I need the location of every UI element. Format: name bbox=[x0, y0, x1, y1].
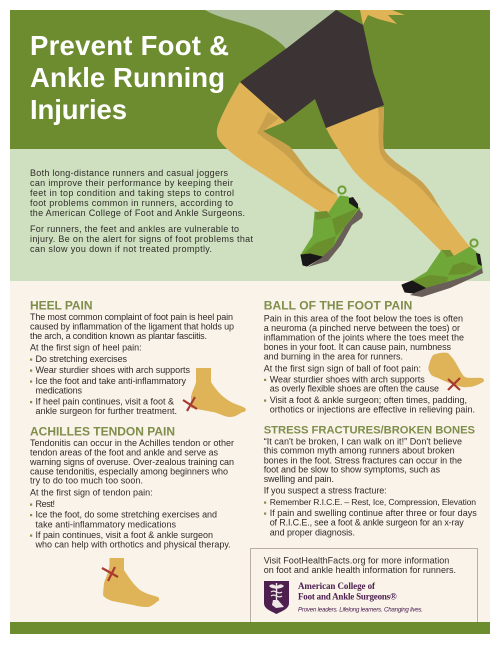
title: Ankle Running bbox=[30, 62, 225, 93]
list: ball of foot tips bbox=[264, 374, 475, 414]
text: ball of foot body: inflammation of the joints where the toes meet the bbox=[264, 332, 464, 342]
text: ball of foot body: a neuroma (a pinched nerve between the toes) or bbox=[264, 323, 460, 333]
panel: green header bbox=[10, 10, 490, 149]
text: ball of foot body: bones in your foot. It can cause pain, numbness bbox=[264, 342, 452, 352]
list: achilles tips: Ice the foot, do some stretching exercises and bbox=[36, 510, 217, 520]
text: visit site: Visit FootHealthFacts.org for more information bbox=[264, 555, 449, 565]
text: ball of foot body: At the first sign sign of ball of foot pain: bbox=[264, 363, 421, 373]
callout: visit box bbox=[250, 548, 478, 622]
list: heel pain tips: ankle surgeon for further treatment. bbox=[36, 406, 177, 416]
list: ball of foot tips: Visit a foot & ankle surgeon; often times, padding, bbox=[270, 395, 467, 405]
text: stress fractures body: this common myth among runners about broken bbox=[264, 446, 455, 456]
front leg shade bbox=[378, 107, 442, 211]
list: ball of foot tips: as overly flexible shoes are often the cause bbox=[270, 384, 439, 394]
back leg bbox=[217, 82, 345, 216]
shoe: back foot bbox=[301, 186, 363, 267]
heading: stress fractures: STRESS FRACTURES/BROKEN BONES bbox=[264, 424, 476, 436]
list: ball of foot tips: Wear sturdier shoes with arch supports bbox=[270, 374, 425, 384]
text: stress fractures body bbox=[264, 436, 462, 496]
intro text bbox=[30, 168, 253, 254]
text: achilles body: try to do too much too soon. bbox=[30, 476, 143, 486]
heading: achilles: ACHILLES TENDON PAIN bbox=[30, 424, 175, 438]
front leg bbox=[326, 107, 474, 262]
list: heel pain tips: If heel pain continues, visit a foot & bbox=[36, 396, 174, 406]
list: achilles tips: take anti-inflammatory medications bbox=[36, 519, 176, 529]
section: achilles tendon pain bbox=[29, 424, 234, 550]
intro text: injury. Be on the alert for signs of foot problems that bbox=[30, 234, 253, 244]
title: Prevent Foot & bbox=[30, 30, 229, 61]
list: heel pain tips: Wear sturdier shoes with arch supports bbox=[36, 365, 190, 375]
list: heel pain tips bbox=[30, 354, 190, 416]
text: heel pain body: The most common complaint of foot pain is heel pain bbox=[30, 312, 233, 322]
text: achilles body: tendon areas of the foot and ankle and serve as bbox=[30, 448, 218, 458]
intro text: can slow you down if not treated promptly. bbox=[30, 244, 212, 254]
text: ball of foot body: Pain in this area of the foot below the toes is often bbox=[264, 313, 463, 323]
list: achilles tips: who can help with orthotics and physical therapy. bbox=[34, 540, 231, 550]
list: ball of foot tips: orthotics or injections are effective in relieving pain. bbox=[270, 404, 475, 414]
text: visit site: on foot and ankle health information for runners. bbox=[264, 565, 456, 575]
text: achilles body: cause tendonitis, especially among beginners who bbox=[30, 466, 228, 476]
panel: content background bbox=[10, 281, 490, 622]
text: ball of foot body: and burning in the area for runners. bbox=[264, 351, 403, 361]
intro text: the American College of Foot and Ankle Surgeons. bbox=[30, 208, 245, 218]
text: stress fractures body: swelling and pain. bbox=[264, 474, 334, 484]
heading: ball of foot: BALL OF THE FOOT PAIN bbox=[264, 298, 412, 312]
list: heel pain tips: medications bbox=[36, 386, 82, 396]
shirt bbox=[205, 10, 336, 50]
back leg shade bbox=[257, 112, 337, 195]
list: heel pain tips: Ice the foot and take anti-inflammatory bbox=[36, 376, 186, 386]
shorts bbox=[240, 10, 384, 128]
text: stress fractures body: foot and be slow to show symptoms, such as bbox=[264, 465, 440, 475]
shoe: front foot bbox=[412, 239, 482, 288]
logo: wordmark: Proven leaders. Lifelong learners. Changing lives. bbox=[298, 607, 423, 614]
intro text: foot problems common in runners, according to bbox=[30, 198, 233, 208]
text: visit site bbox=[264, 555, 456, 575]
text: stress fractures body: “It can't be broken, I can walk on it!” Don't believe bbox=[264, 436, 462, 446]
logo: shield bbox=[264, 581, 289, 614]
logo: wordmark: American College of bbox=[298, 581, 376, 591]
text: heel pain body bbox=[30, 312, 234, 352]
text: achilles body: At the first sign of tendon pain: bbox=[30, 488, 153, 498]
icon: achilles foot bbox=[102, 558, 159, 607]
intro text: For runners, the feet and ankles are vulnerable to bbox=[30, 224, 239, 234]
section: ball of the foot pain bbox=[264, 298, 475, 414]
logo: wordmark bbox=[298, 581, 423, 614]
intro text: Both long-distance runners and casual joggers bbox=[30, 168, 228, 178]
text: heel pain body: At the first sign of heel pain: bbox=[30, 342, 142, 352]
panel: intro background bbox=[10, 149, 490, 281]
intro text: can improve their performance by keeping their bbox=[30, 178, 233, 188]
footer bar bbox=[10, 622, 490, 634]
title: Injuries bbox=[30, 94, 127, 125]
list: achilles tips: If pain continues, visit a foot & ankle surgeon bbox=[36, 530, 213, 540]
text: heel pain body: caused by inflammation of the ligament that holds up bbox=[30, 322, 234, 332]
list: heel pain tips: Do stretching exercises bbox=[36, 354, 128, 364]
list: stress fracture tips: If pain and swelling continue after three or four days bbox=[270, 508, 477, 518]
hand bbox=[360, 10, 405, 25]
illustration: runner legs bbox=[205, 10, 482, 288]
list: achilles tips bbox=[30, 499, 231, 550]
list: achilles tips: Rest! bbox=[36, 499, 55, 509]
list: stress fracture tips: of R.I.C.E., see a foot & ankle surgeon for an x-ray bbox=[270, 518, 464, 528]
intro text: feet in top condition and taking steps to control bbox=[30, 188, 234, 198]
text: stress fractures body: bones in the foot. Stress fractures can occur in the bbox=[264, 455, 462, 465]
icon: heel foot bbox=[183, 368, 246, 417]
icon: ball of foot bbox=[428, 353, 484, 390]
list: stress fracture tips bbox=[264, 497, 477, 537]
text: achilles body: Tendonitis can occur in the Achilles tendon or other bbox=[30, 438, 234, 448]
front shoe overhang onto cream panel bbox=[402, 268, 483, 297]
text: achilles body bbox=[29, 438, 234, 498]
list: stress fracture tips: Remember R.I.C.E. – Rest, Ice, Compression, Elevation bbox=[270, 497, 476, 507]
section: heel pain bbox=[30, 298, 234, 416]
logo: wordmark: Foot and Ankle Surgeons® bbox=[298, 591, 397, 601]
text: heel pain body: the arch, a condition known as plantar fasciitis. bbox=[30, 331, 207, 341]
list: stress fracture tips: and proper diagnosis. bbox=[270, 527, 355, 537]
section: stress fractures bbox=[264, 424, 477, 537]
text: ball of foot body bbox=[264, 313, 464, 373]
title bbox=[30, 30, 229, 125]
heading: heel pain: HEEL PAIN bbox=[30, 298, 92, 312]
text: achilles body: warning signs of overuse. Over-zealous training can bbox=[29, 457, 234, 467]
text: stress fractures body: If you suspect a stress fracture: bbox=[264, 486, 387, 496]
